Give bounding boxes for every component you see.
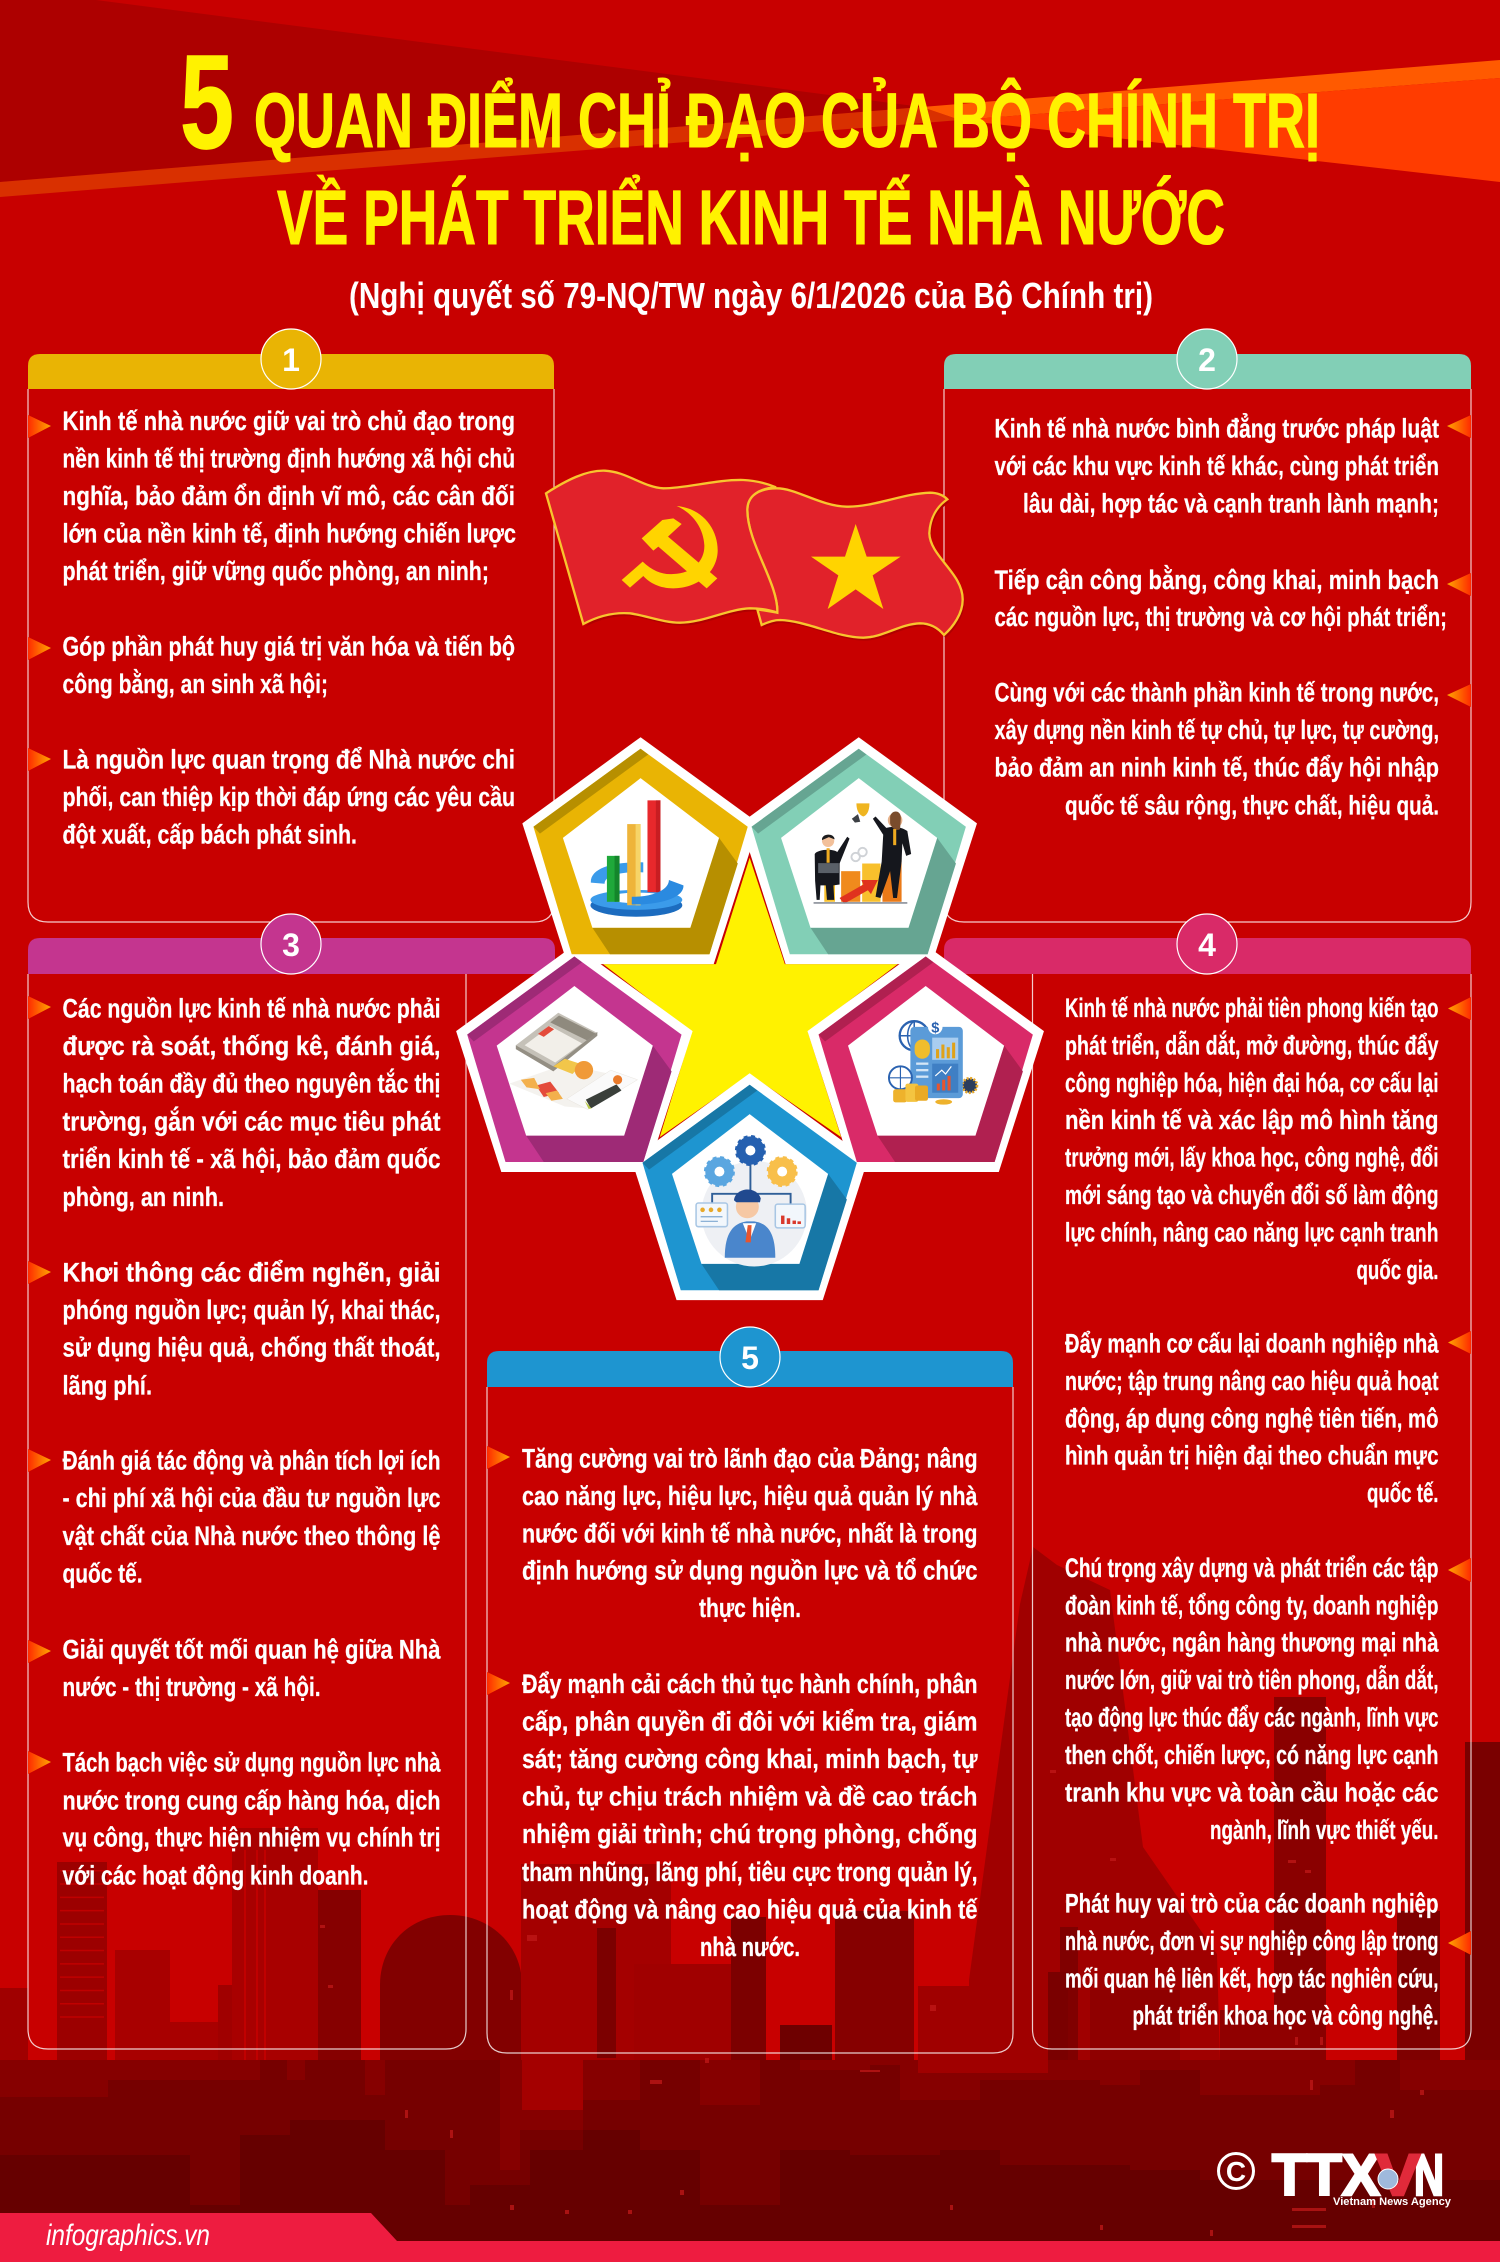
icon: calculator and reports <box>509 1013 638 1110</box>
panel 5 text: nước đối với kinh tế nhà nước, nhất là trong <box>522 1518 978 1548</box>
panel 3 text: trường, gắn với các mục tiêu phát <box>62 1106 441 1136</box>
icon: finance dashboard: $ <box>931 1020 939 1036</box>
panel 3 text: Đánh giá tác động và phân tích lợi ích <box>62 1446 440 1476</box>
panel 3 header <box>28 938 555 974</box>
panel 3 text: - chi phí xã hội của đầu tư nguồn lực <box>62 1483 440 1513</box>
panel 1 text: công bằng, an sinh xã hội; <box>62 668 328 699</box>
icon: finance dashboard <box>889 1020 977 1105</box>
panel 3 text: vật chất của Nhà nước theo thông lệ <box>62 1521 440 1551</box>
central star and pentagons <box>456 737 1044 1300</box>
panel 3 text: Các nguồn lực kinh tế nhà nước phải <box>62 994 440 1024</box>
panel 3 number: 3 <box>282 927 300 963</box>
panel 5 text: sát; tăng cường công khai, minh bạch, tự <box>522 1744 978 1774</box>
panel 1 <box>28 329 554 922</box>
pentagon 1 with chart icon <box>533 749 748 954</box>
flags <box>546 471 964 641</box>
panel 1 text: đột xuất, cấp bách phát sinh. <box>62 820 357 850</box>
panel 1 text: phối, can thiệp kịp thời đáp ứng các yêu cầu <box>62 782 515 812</box>
panel 3 text: Giải quyết tốt mối quan hệ giữa Nhà <box>62 1634 441 1664</box>
icon: businessmen and trophy <box>814 803 911 904</box>
panel 3 text: Tách bạch việc sử dụng nguồn lực nhà <box>62 1748 441 1778</box>
panel 3 text: nước - thị trường - xã hội. <box>62 1672 320 1702</box>
panel 3 <box>28 914 555 2049</box>
pentagon 5 with manager icon <box>642 1085 857 1290</box>
panel 3 text: sử dụng hiệu quả, chống thất thoát, <box>62 1332 440 1362</box>
panel 5 number: 5 <box>741 1340 759 1376</box>
panel 5 bullets <box>487 1446 510 1695</box>
city skyline background <box>0 1547 1500 2262</box>
panel 2 number <box>1177 329 1237 389</box>
panel 1 text: phát triển, giữ vững quốc phòng, an ninh; <box>62 556 489 586</box>
panel 3 text: quốc tế. <box>62 1558 142 1588</box>
flag: Party <box>546 471 777 624</box>
panel 3 text: Khơi thông các điểm nghẽn, giải <box>62 1258 440 1288</box>
background rays <box>0 0 1500 197</box>
panel 1 text: Kinh tế nhà nước giữ vai trò chủ đạo trong <box>62 406 515 436</box>
panel 5 text: chủ, tự chịu trách nhiệm và đề cao trách <box>522 1782 978 1812</box>
icon: manager with gears <box>696 1137 807 1266</box>
panel 5 text: Tăng cường vai trò lãnh đạo của Đảng; nâng <box>522 1444 978 1474</box>
panel 3 text: được rà soát, thống kê, đánh giá, <box>62 1031 440 1061</box>
icon: 3D bar chart <box>590 800 683 917</box>
panel 4 text <box>1065 993 1439 2030</box>
panel 3 text: lãng phí. <box>62 1370 152 1400</box>
window lights <box>320 1770 1424 2236</box>
bottom bar <box>0 2213 1500 2262</box>
panel 1 number <box>261 329 321 389</box>
logo TTXVN <box>1218 2143 1452 2208</box>
panel 1 text: lớn của nền kinh tế, định hướng chiến lược <box>62 518 516 548</box>
panel 5 header <box>487 1351 1013 1387</box>
panel 5 text: tham nhũng, lãng phí, tiêu cực trong quản lý, <box>522 1857 978 1887</box>
panel 1 text: nền kinh tế thị trường định hướng xã hội chủ <box>62 444 515 474</box>
copyright symbol <box>1218 2154 1254 2188</box>
panel 5 text: nhiệm giải trình; chú trọng phòng, chống <box>522 1819 978 1849</box>
panel 3 text: hạch toán đầy đủ theo nguyên tắc thị <box>62 1068 440 1098</box>
panel 3 text: vụ công, thực hiện nhiệm vụ chính trị <box>62 1822 440 1852</box>
website label: infographics.vn <box>46 2219 210 2252</box>
panel 3 text: nước trong cung cấp hàng hóa, dịch <box>62 1786 440 1816</box>
panel 1 text <box>62 406 516 850</box>
title: 5 <box>180 28 234 177</box>
panel 5 number <box>720 1327 780 1387</box>
panel 3 number <box>261 914 321 974</box>
panel 4 text: quốc gia. <box>1356 1255 1438 1285</box>
panel 5 text: nhà nước. <box>700 1932 800 1962</box>
pentagon 3 with calculator icon <box>467 957 682 1162</box>
panel 2 header <box>944 354 1471 389</box>
copyright symbol: C <box>1226 2156 1246 2187</box>
panel 1 text: Góp phần phát huy giá trị văn hóa và tiến bộ <box>62 632 515 662</box>
panel 5 text: cao năng lực, hiệu lực, hiệu quả quản lý nhà <box>522 1481 978 1511</box>
logo TTXVN: V <box>1376 2143 1420 2208</box>
panel 3 text: với các hoạt động kinh doanh. <box>62 1860 368 1890</box>
panel 2 number: 2 <box>1198 342 1216 378</box>
panel 3 text: phòng, an ninh. <box>62 1182 224 1212</box>
logo TTXVN: TTX <box>1272 2143 1380 2208</box>
panel 5 text: hoạt động và nâng cao hiệu quả của kinh tế <box>522 1894 978 1924</box>
pentagon 4 with finance icon <box>819 957 1033 1162</box>
panel 3 bullets <box>28 996 51 1774</box>
pentagon white frames <box>456 737 1044 1300</box>
panel 2 bullets <box>1447 415 1471 707</box>
panel 2 text <box>994 412 1447 820</box>
title <box>180 28 1320 261</box>
logo TTXVN: Vietnam News Agency <box>1333 2196 1452 2208</box>
pentagon 2 with business icon <box>752 749 966 954</box>
panel 4 text: quốc tế. <box>1367 1478 1438 1508</box>
panel 1 text: nghĩa, bảo đảm ổn định vĩ mô, các cân đối <box>62 481 515 511</box>
yellow star <box>603 858 898 1137</box>
panel 4 header <box>944 938 1471 974</box>
panel 5 <box>487 1327 1013 2053</box>
panel 3 text: triển kinh tế - xã hội, bảo đảm quốc <box>62 1144 440 1174</box>
panel 5 text: định hướng sử dụng nguồn lực và tổ chức <box>522 1556 978 1586</box>
panel 3 text: phóng nguồn lực; quản lý, khai thác, <box>62 1295 440 1325</box>
logo TTXVN: N <box>1414 2143 1444 2208</box>
panel 1 number: 1 <box>282 342 300 378</box>
panel 2 <box>944 329 1471 922</box>
panel 5 text: thực hiện. <box>699 1593 801 1623</box>
panel 4 number <box>1177 914 1237 974</box>
panel 5 text: cấp, phân quyền đi đôi với kiểm tra, giám <box>522 1706 978 1736</box>
panel 1 bullets <box>28 415 51 771</box>
panel 1 header <box>28 354 554 389</box>
panel 4 bullets <box>1448 997 1471 1955</box>
panel 5 text <box>522 1444 978 1962</box>
panel 3 text <box>62 994 441 1890</box>
flag shadows <box>585 491 964 641</box>
subtitle: (Nghị quyết số 79-NQ/TW ngày 6/1/2026 của Bộ Chính trị) <box>349 275 1153 316</box>
panel 4 number: 4 <box>1198 927 1216 963</box>
panel 1 text: Là nguồn lực quan trọng để Nhà nước chi <box>62 744 515 774</box>
flag: Vietnam <box>747 488 963 638</box>
panel 4 <box>944 914 1471 2049</box>
panel 5 text: Đẩy mạnh cải cách thủ tục hành chính, phân <box>522 1669 978 1699</box>
